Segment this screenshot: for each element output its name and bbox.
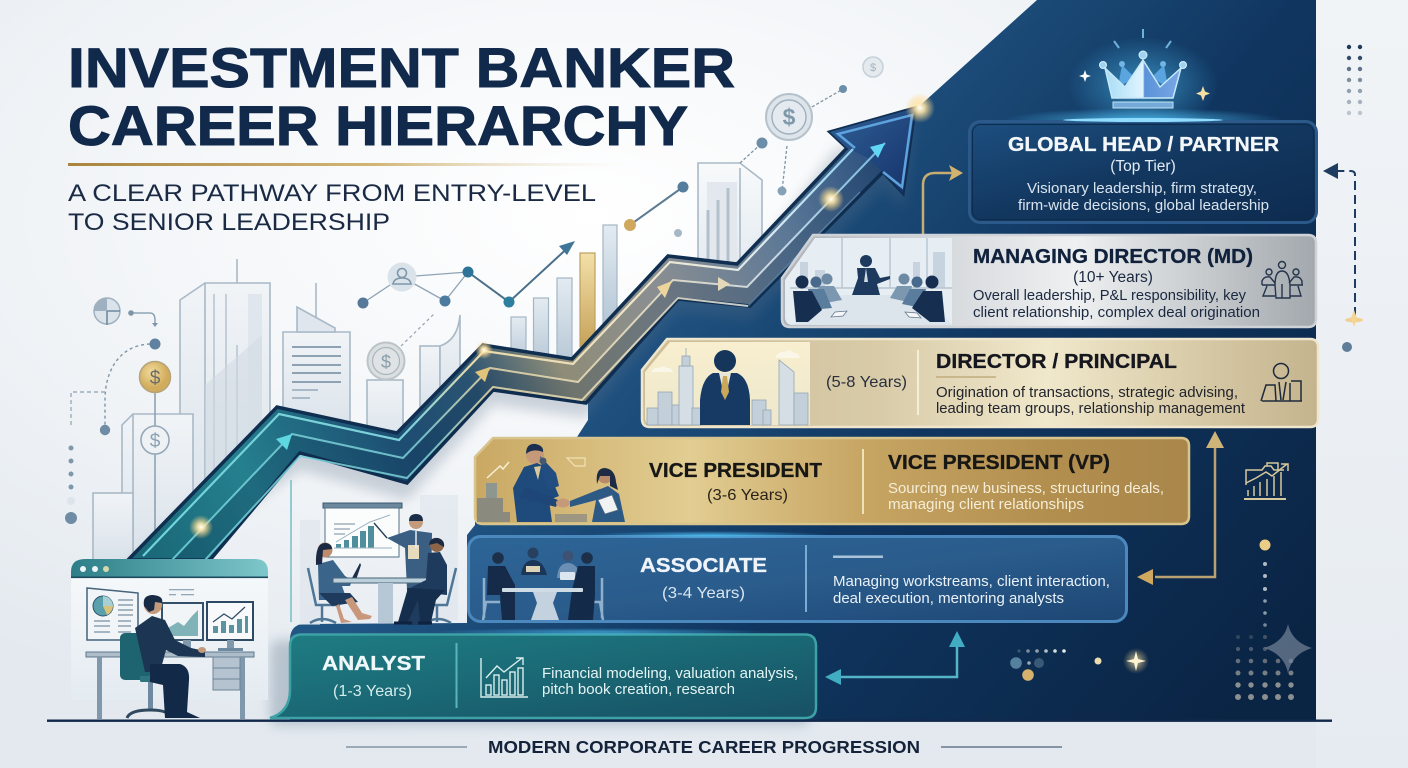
description: Managing Director: Overall leadership, P&L responsibility, key [973,288,1247,304]
icon: grey coin: $ [381,352,391,372]
panel: Director / Principal [642,339,1318,427]
subtitle: TO SENIOR LEADERSHIP [68,209,390,236]
description: Analyst: Financial modeling, valuation analysis, [542,666,798,682]
left city skyline [93,163,762,570]
main title [68,36,735,157]
footer caption: MODERN CORPORATE CAREER PROGRESSION [488,737,920,757]
heading: VP right: VICE PRESIDENT (VP) [888,452,1110,474]
heading: Vice President left: VICE PRESIDENT [649,460,822,482]
divider [805,545,807,612]
illustration: boardroom [785,238,952,325]
description: Director: Origination of transactions, strategic advising, [936,385,1238,401]
divider [456,643,458,708]
description: VP: managing client relationships [888,497,1084,513]
icon: pale top coin: $ [870,62,876,74]
divider [862,449,864,514]
icon: grey coin [368,313,435,380]
skyline bars [511,225,617,368]
tenure: Top Tier: (Top Tier) [1110,158,1176,175]
icon: pale top coin [863,57,883,77]
heading: Associate: ASSOCIATE [640,555,767,577]
tenure: 5-8 Years: (5-8 Years) [826,374,907,391]
decorative dot trail [1260,540,1270,627]
icon: growth bar chart [481,658,528,697]
decorative dot grid and star [1235,624,1312,700]
arrow: dashed navy to Global Head [1323,163,1363,352]
icon: pie and dotted connectors [65,298,160,524]
icon: leader with charts [1261,364,1302,401]
dark navy backdrop [290,0,1316,720]
icon: large grey coin: $ [783,104,796,130]
decorative right dots [1347,45,1362,115]
icon: gold coin column [140,362,170,600]
career path arrow [118,93,935,575]
arrow: teal up to Associate [825,631,965,685]
illustration: team at round table [483,548,603,620]
description: Director: leading team groups, relationship management [936,401,1245,417]
right light strip [1316,0,1408,768]
heading: Managing Director: MANAGING DIRECTOR (MD) [973,246,1253,268]
heading: Global Head: GLOBAL HEAD / PARTNER [1008,134,1280,156]
main title: INVESTMENT BANKER [68,36,735,99]
description: Analyst [542,666,798,698]
crown icon [1068,29,1218,133]
panel: Analyst [270,628,816,725]
panel: Global Head / Partner [970,108,1316,222]
description: Managing Director [973,288,1260,321]
tenure: 1-3 Years: (1-3 Years) [333,683,412,700]
icon: gold coin column: $ [150,368,161,389]
illustration: analyst at desk [71,559,268,719]
heading: Analyst: ANALYST [322,653,425,675]
floor line [47,720,1332,722]
arrow: MD to Global Head [923,165,963,234]
description: VP: Sourcing new business, structuring deals, [888,481,1164,497]
description: VP [888,481,1164,513]
icon: briefcase growth [1244,463,1288,499]
tenure: 3-6 Years: (3-6 Years) [707,487,788,504]
description: Global Head: firm-wide decisions, global leadership [1018,198,1269,214]
tenure: 3-4 Years: (3-4 Years) [662,585,745,602]
description: Analyst: pitch book creation, research [542,682,735,698]
description: Associate: Managing workstreams, client interaction, [833,574,1110,590]
divider [917,350,919,415]
network and finance icons [358,85,847,308]
panel: Managing Director [782,235,1316,327]
panel: Vice President [475,438,1189,524]
subtitle [68,180,596,236]
description: Associate: deal execution, mentoring analysts [833,591,1064,607]
heading: Director: DIRECTOR / PRINCIPAL [936,351,1177,373]
illustration: handshake [477,444,625,522]
main title: CAREER HIERARCHY [68,94,688,157]
tenure: 10+ Years: (10+ Years) [1073,269,1153,286]
description: Director [936,385,1245,417]
illustration: city and executive [645,342,810,425]
icon: team [1262,262,1303,298]
decorative cluster and sparkle [1010,648,1149,681]
panel: Associate [468,531,1126,622]
description: Associate [833,574,1110,607]
description: Global Head: Visionary leadership, firm strategy, [1027,181,1257,197]
description: Managing Director: client relationship, complex deal origination [973,305,1260,321]
arrow: gold up to Director [1137,431,1224,585]
illustration: meeting with presenter [291,480,458,625]
icon: large grey coin [766,94,812,140]
title rule [68,163,628,166]
description: Global Head [1018,181,1269,214]
icon: gold coin column: $ [150,431,161,452]
subtitle: A CLEAR PATHWAY FROM ENTRY-LEVEL [68,180,596,207]
